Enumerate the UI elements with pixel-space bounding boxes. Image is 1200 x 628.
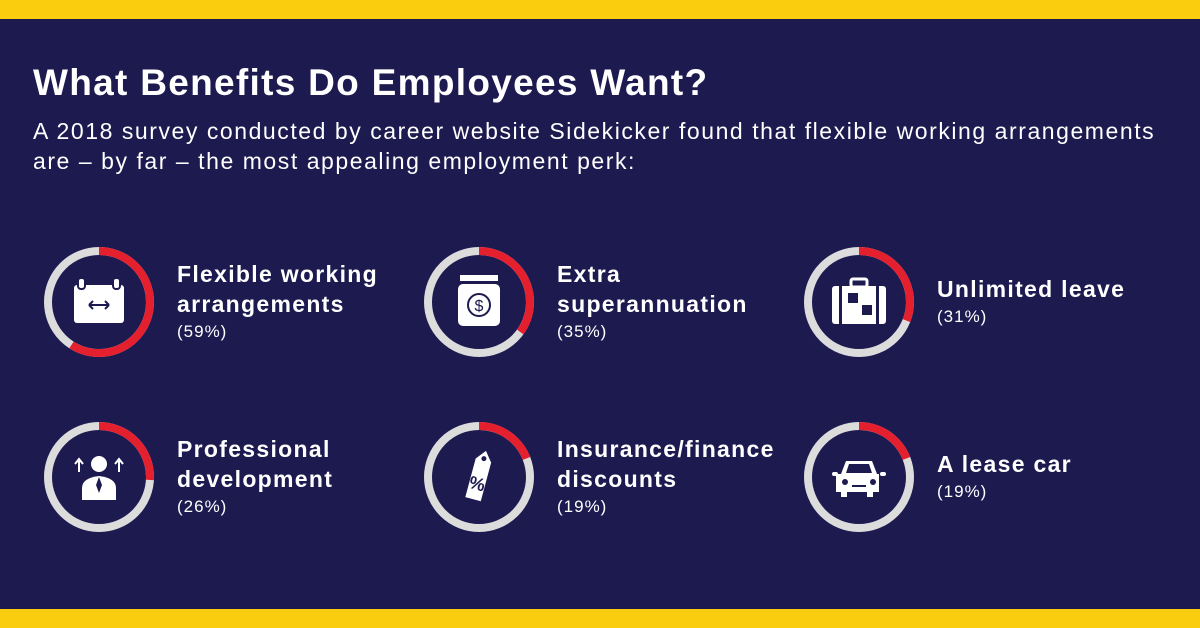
panel: professional development: (26%) <box>177 497 227 516</box>
panel: professional development: development <box>177 466 333 492</box>
panel: flexible working <box>44 247 378 357</box>
panel: unlimited leave <box>804 247 1125 357</box>
panel: professional development: Professional <box>177 436 331 462</box>
panel: superannuation <box>424 247 748 357</box>
title: What Benefits Do Employees Want? <box>33 62 708 103</box>
panel: unlimited leave: (31%) <box>937 307 987 326</box>
panel: unlimited leave: Unlimited leave <box>937 276 1125 302</box>
panel: lease car <box>804 422 1072 532</box>
panel: insurance: (19%) <box>557 497 607 516</box>
subtitle: are – by far – the most appealing employment perk: <box>33 148 636 174</box>
panel: insurance: % <box>467 472 488 495</box>
panel: insurance: discounts <box>557 466 677 492</box>
subtitle: A 2018 survey conducted by career website Sidekicker found that flexible working arrangements <box>33 118 1155 144</box>
panel: flexible working: (59%) <box>177 322 227 341</box>
panel: superannuation: superannuation <box>557 291 748 317</box>
subtitle <box>33 118 1155 174</box>
panel: superannuation: $ <box>475 298 484 315</box>
panel: lease car: (19%) <box>937 482 987 501</box>
panel: superannuation: Extra <box>557 261 621 287</box>
panel: insurance: Insurance/finance <box>557 436 775 462</box>
panel: lease car: A lease car <box>937 451 1072 477</box>
panel: insurance <box>424 422 775 532</box>
panel: flexible working: Flexible working <box>177 261 378 287</box>
panel: flexible working: arrangements <box>177 291 345 317</box>
panel: professional development <box>44 422 333 532</box>
panel: superannuation: (35%) <box>557 322 607 341</box>
